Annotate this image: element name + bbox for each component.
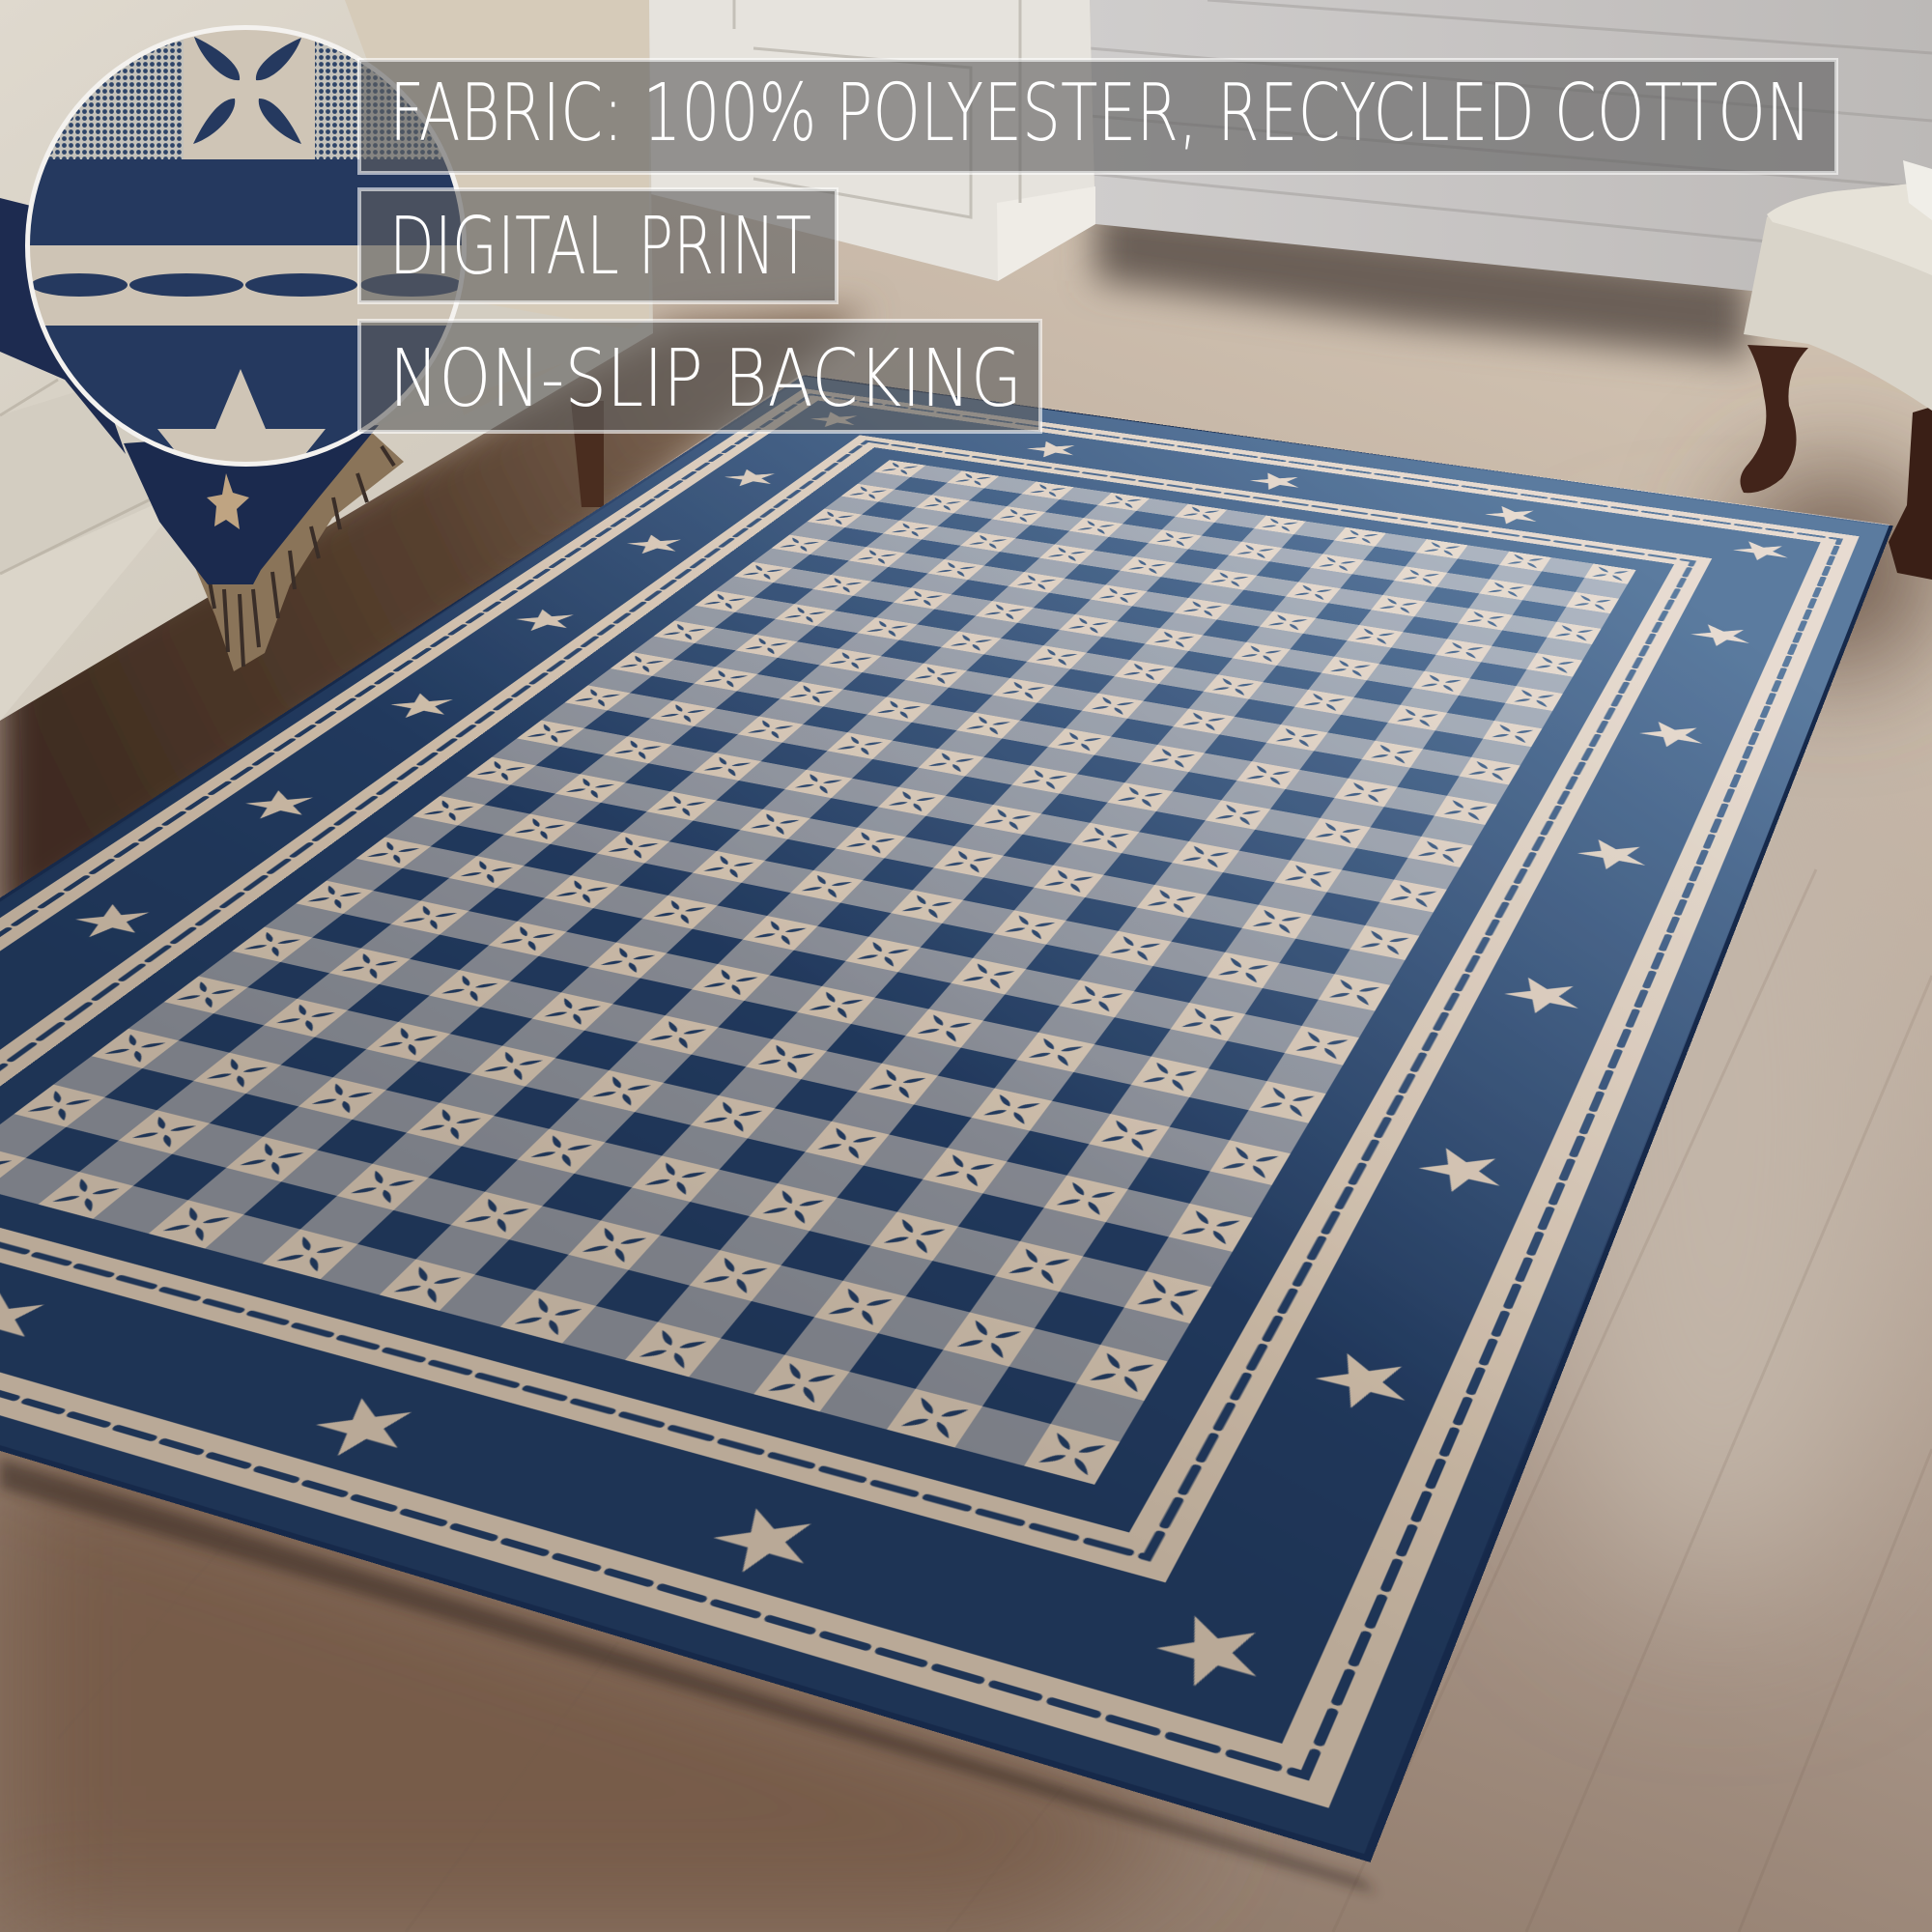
cream stripe <box>19 245 473 327</box>
border stars <box>0 410 1800 1720</box>
rug shadow <box>0 1459 1377 1893</box>
chain ovals <box>31 273 463 297</box>
throw star <box>207 473 249 529</box>
navy lower band <box>44 326 446 453</box>
stool with legs and book <box>1740 160 1932 580</box>
throw blanket with fringe <box>0 198 404 671</box>
label: non-slip backing: NON-SLIP BACKING <box>389 333 1022 425</box>
inner cream border with chain <box>0 441 1693 1557</box>
label: digital print <box>359 189 837 302</box>
cream checker square <box>184 19 315 161</box>
white cabinet <box>647 0 1095 281</box>
rug in perspective <box>0 375 1893 1862</box>
cream star <box>157 369 326 462</box>
label: digital print: DIGITAL PRINT <box>389 201 811 293</box>
shiplap wall <box>1090 0 1932 309</box>
navy band <box>19 159 473 246</box>
inset ring <box>27 27 464 464</box>
rug navy base <box>0 376 1891 1858</box>
sofa <box>0 0 653 721</box>
gingham field <box>0 460 1636 1485</box>
heather weave <box>48 39 444 159</box>
petal motif <box>193 37 301 144</box>
magnified fabric inset circle <box>25 25 467 467</box>
outer cream border with chain <box>0 394 1840 1776</box>
